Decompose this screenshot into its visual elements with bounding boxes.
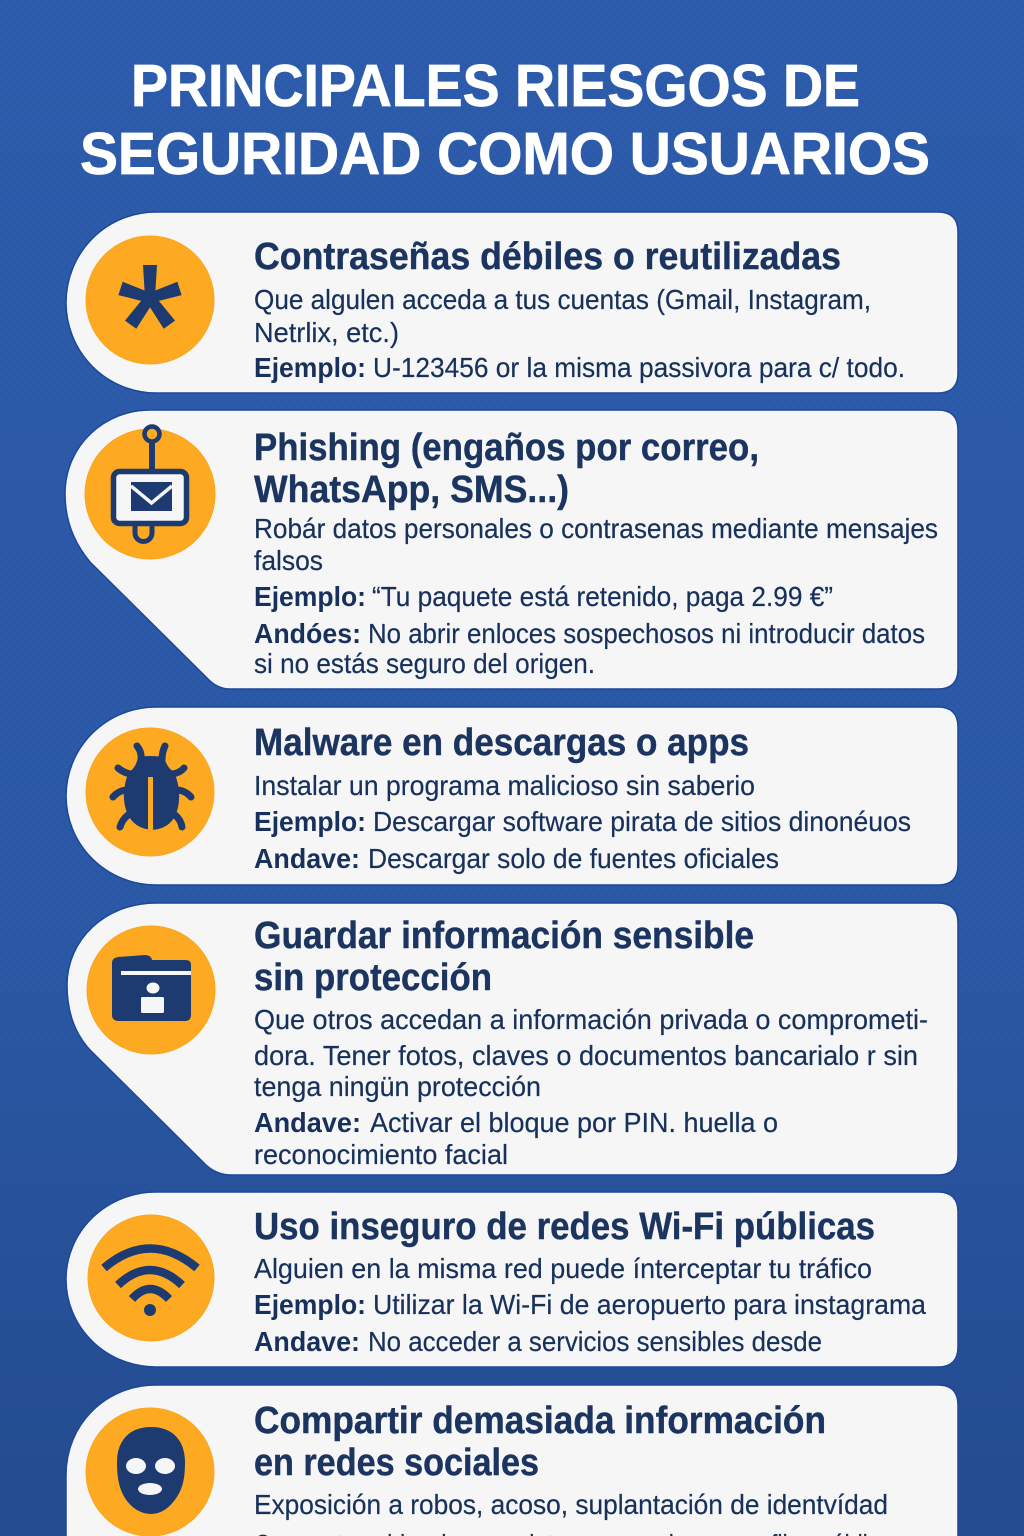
body text: Andave:: [254, 1326, 360, 1357]
card background: [65, 410, 958, 689]
card background: [66, 1192, 958, 1367]
card background: [66, 707, 958, 885]
body text: si no estás seguro del origen.: [254, 648, 595, 679]
body text: No acceder a servicios sensibles desde: [368, 1326, 822, 1357]
heading: WhatsApp, SMS...): [254, 469, 569, 511]
body text: “Tu paquete está retenido, paga 2.99 €”: [372, 581, 833, 612]
body text: Activar el bloque por PIN. huella o: [370, 1107, 778, 1138]
body text: Robár datos personales o contrasenas mediante mensajes: [254, 513, 938, 544]
body text: No abrir enloces sospechosos ni introducir datos: [368, 618, 925, 649]
body text: Descargar solo de fuentes oficiales: [368, 843, 779, 874]
icon: bug: [86, 728, 214, 856]
body text: dora. Tener fotos, claves o documentos bancarialo r sin: [254, 1040, 918, 1071]
body text: Exposición a robos, acoso, suplantación de identvídad: [254, 1489, 888, 1520]
body text: [254, 1004, 928, 1170]
title: [80, 53, 930, 187]
card background: [66, 212, 958, 393]
body text: [254, 284, 905, 383]
body text: tenga ningün protección: [254, 1071, 541, 1102]
body text: [254, 1489, 904, 1536]
panel: redes sociales: [66, 1385, 958, 1536]
panel: contraseñas débiles: [66, 212, 958, 393]
title: SEGURIDAD COMO USUARIOS: [80, 121, 930, 187]
body text: Utilizar la Wi-Fi de aeropuerto para instagrama: [373, 1289, 926, 1320]
body text: Que otros accedan a información privada o comprometi-: [254, 1004, 928, 1035]
body text: Ejemplo:: [254, 352, 366, 383]
body text: Que algulen acceda a tus cuentas (Gmail, Instagram,: [254, 284, 871, 315]
icon: locked folder: [87, 926, 215, 1054]
heading: [254, 1400, 826, 1484]
body text: [254, 513, 938, 679]
body text: falsos: [254, 545, 323, 576]
body text: Netrlix, etc.): [254, 317, 399, 348]
panel: wi-fi públicas: [66, 1192, 958, 1367]
heading: Uso inseguro de redes Wi-Fi públicas: [254, 1206, 875, 1248]
body text: Andóes:: [254, 618, 361, 649]
heading: [254, 915, 754, 999]
panel: información sensible: [67, 903, 958, 1175]
title: PRINCIPALES RIESGOS DE: [131, 53, 860, 119]
card background: [66, 1385, 958, 1536]
heading: Malware en descargas o apps: [254, 722, 749, 764]
body text: Ejemplo:: [254, 581, 366, 612]
heading: Contraseñas débiles o reutilizadas: [254, 236, 841, 278]
card background: [67, 903, 958, 1175]
body text: [254, 1253, 926, 1357]
heading: Guardar información sensible: [254, 915, 754, 957]
body text: U-123456 or la misma passivora para c/ todo.: [373, 352, 905, 383]
icon: phishing envelope on hook: [85, 426, 215, 559]
body text: Instalar un programa malicioso sin saberio: [254, 770, 755, 801]
heading: [254, 427, 759, 511]
heading: Compartir demasiada información: [254, 1400, 826, 1442]
body text: Descargar software pirata de sitios dinonéuos: [373, 806, 911, 837]
body text: Andave:: [254, 1107, 361, 1138]
body text: Ejemplo:: [254, 806, 366, 837]
body text: Andave:: [254, 843, 360, 874]
icon: asterisk: [86, 236, 214, 364]
icon: wi-fi: [88, 1215, 214, 1341]
panel: malware: [66, 707, 958, 885]
body text: [254, 770, 911, 874]
icon: mask: [86, 1408, 214, 1536]
body text: Ejemplo:: [254, 1289, 366, 1320]
body text: reconocimiento facial: [254, 1139, 508, 1170]
heading: Phishing (engaños por correo,: [254, 427, 759, 469]
body text: Alguien en la misma red puede ínterceptar tu tráfico: [254, 1253, 872, 1284]
panel: phishing: [65, 410, 958, 689]
heading: en redes sociales: [254, 1442, 539, 1484]
heading: sin protección: [254, 957, 492, 999]
